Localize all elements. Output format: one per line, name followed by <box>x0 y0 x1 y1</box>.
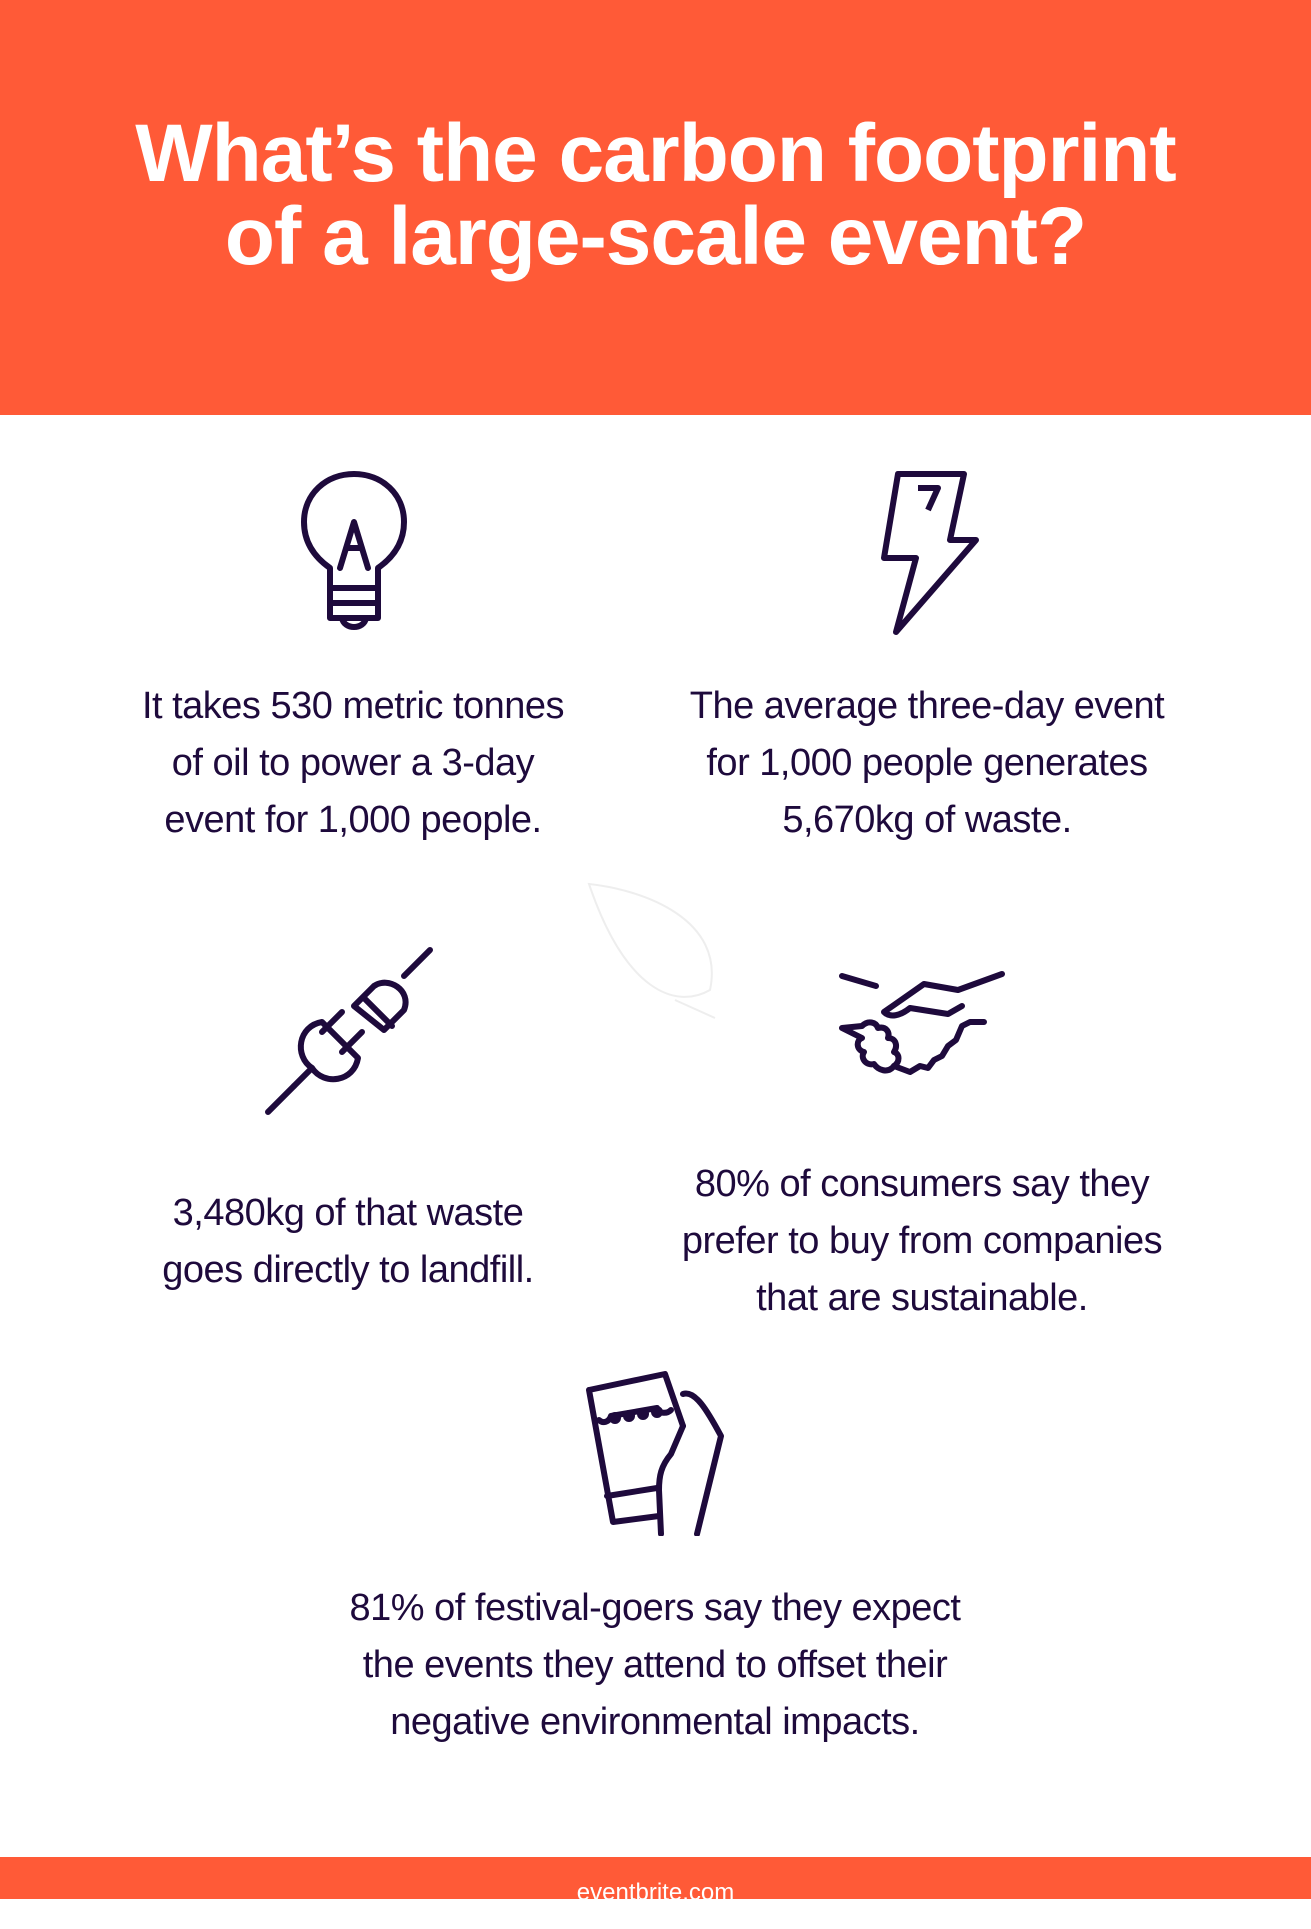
text: waste: 5,670kg of waste. <box>782 799 1072 841</box>
icon: lightbulb <box>301 471 407 630</box>
icon: handshake <box>839 971 1005 1075</box>
text: consumers: prefer to buy from companies <box>682 1220 1162 1262</box>
title: of a large-scale event? <box>225 191 1086 282</box>
text: oil <box>142 685 564 841</box>
text: waste <box>690 685 1164 841</box>
title: What’s the carbon footprint <box>135 108 1176 199</box>
text: festival-goers <box>350 1587 961 1743</box>
icon: plug <box>265 947 433 1115</box>
text: festival-goers: 81% of festival-goers say they expect <box>350 1587 960 1629</box>
text: consumers: that are sustainable. <box>756 1277 1088 1319</box>
footer <box>0 1857 1311 1899</box>
text: landfill: 3,480kg of that waste <box>173 1192 523 1234</box>
text: waste: The average three-day event <box>690 685 1164 727</box>
text: landfill: goes directly to landfill. <box>162 1249 534 1291</box>
footer: eventbrite.com <box>577 1879 734 1906</box>
text: oil: of oil to power a 3-day <box>172 742 534 784</box>
icon: phone ticket in hand <box>586 1371 724 1536</box>
title <box>135 108 1176 282</box>
icon: faint leaf <box>588 883 716 1018</box>
text: oil: event for 1,000 people. <box>164 799 542 841</box>
text: landfill <box>162 1192 534 1291</box>
text: festival-goers: negative environmental impacts. <box>390 1701 920 1743</box>
icon: lightning bolt <box>881 471 979 635</box>
text: waste: for 1,000 people generates <box>706 742 1148 784</box>
header band <box>0 0 1311 415</box>
text: festival-goers: the events they attend to offset their <box>363 1644 947 1686</box>
text: consumers <box>682 1163 1162 1319</box>
text: oil: It takes 530 metric tonnes <box>142 685 564 727</box>
text: consumers: 80% of consumers say they <box>695 1163 1149 1205</box>
